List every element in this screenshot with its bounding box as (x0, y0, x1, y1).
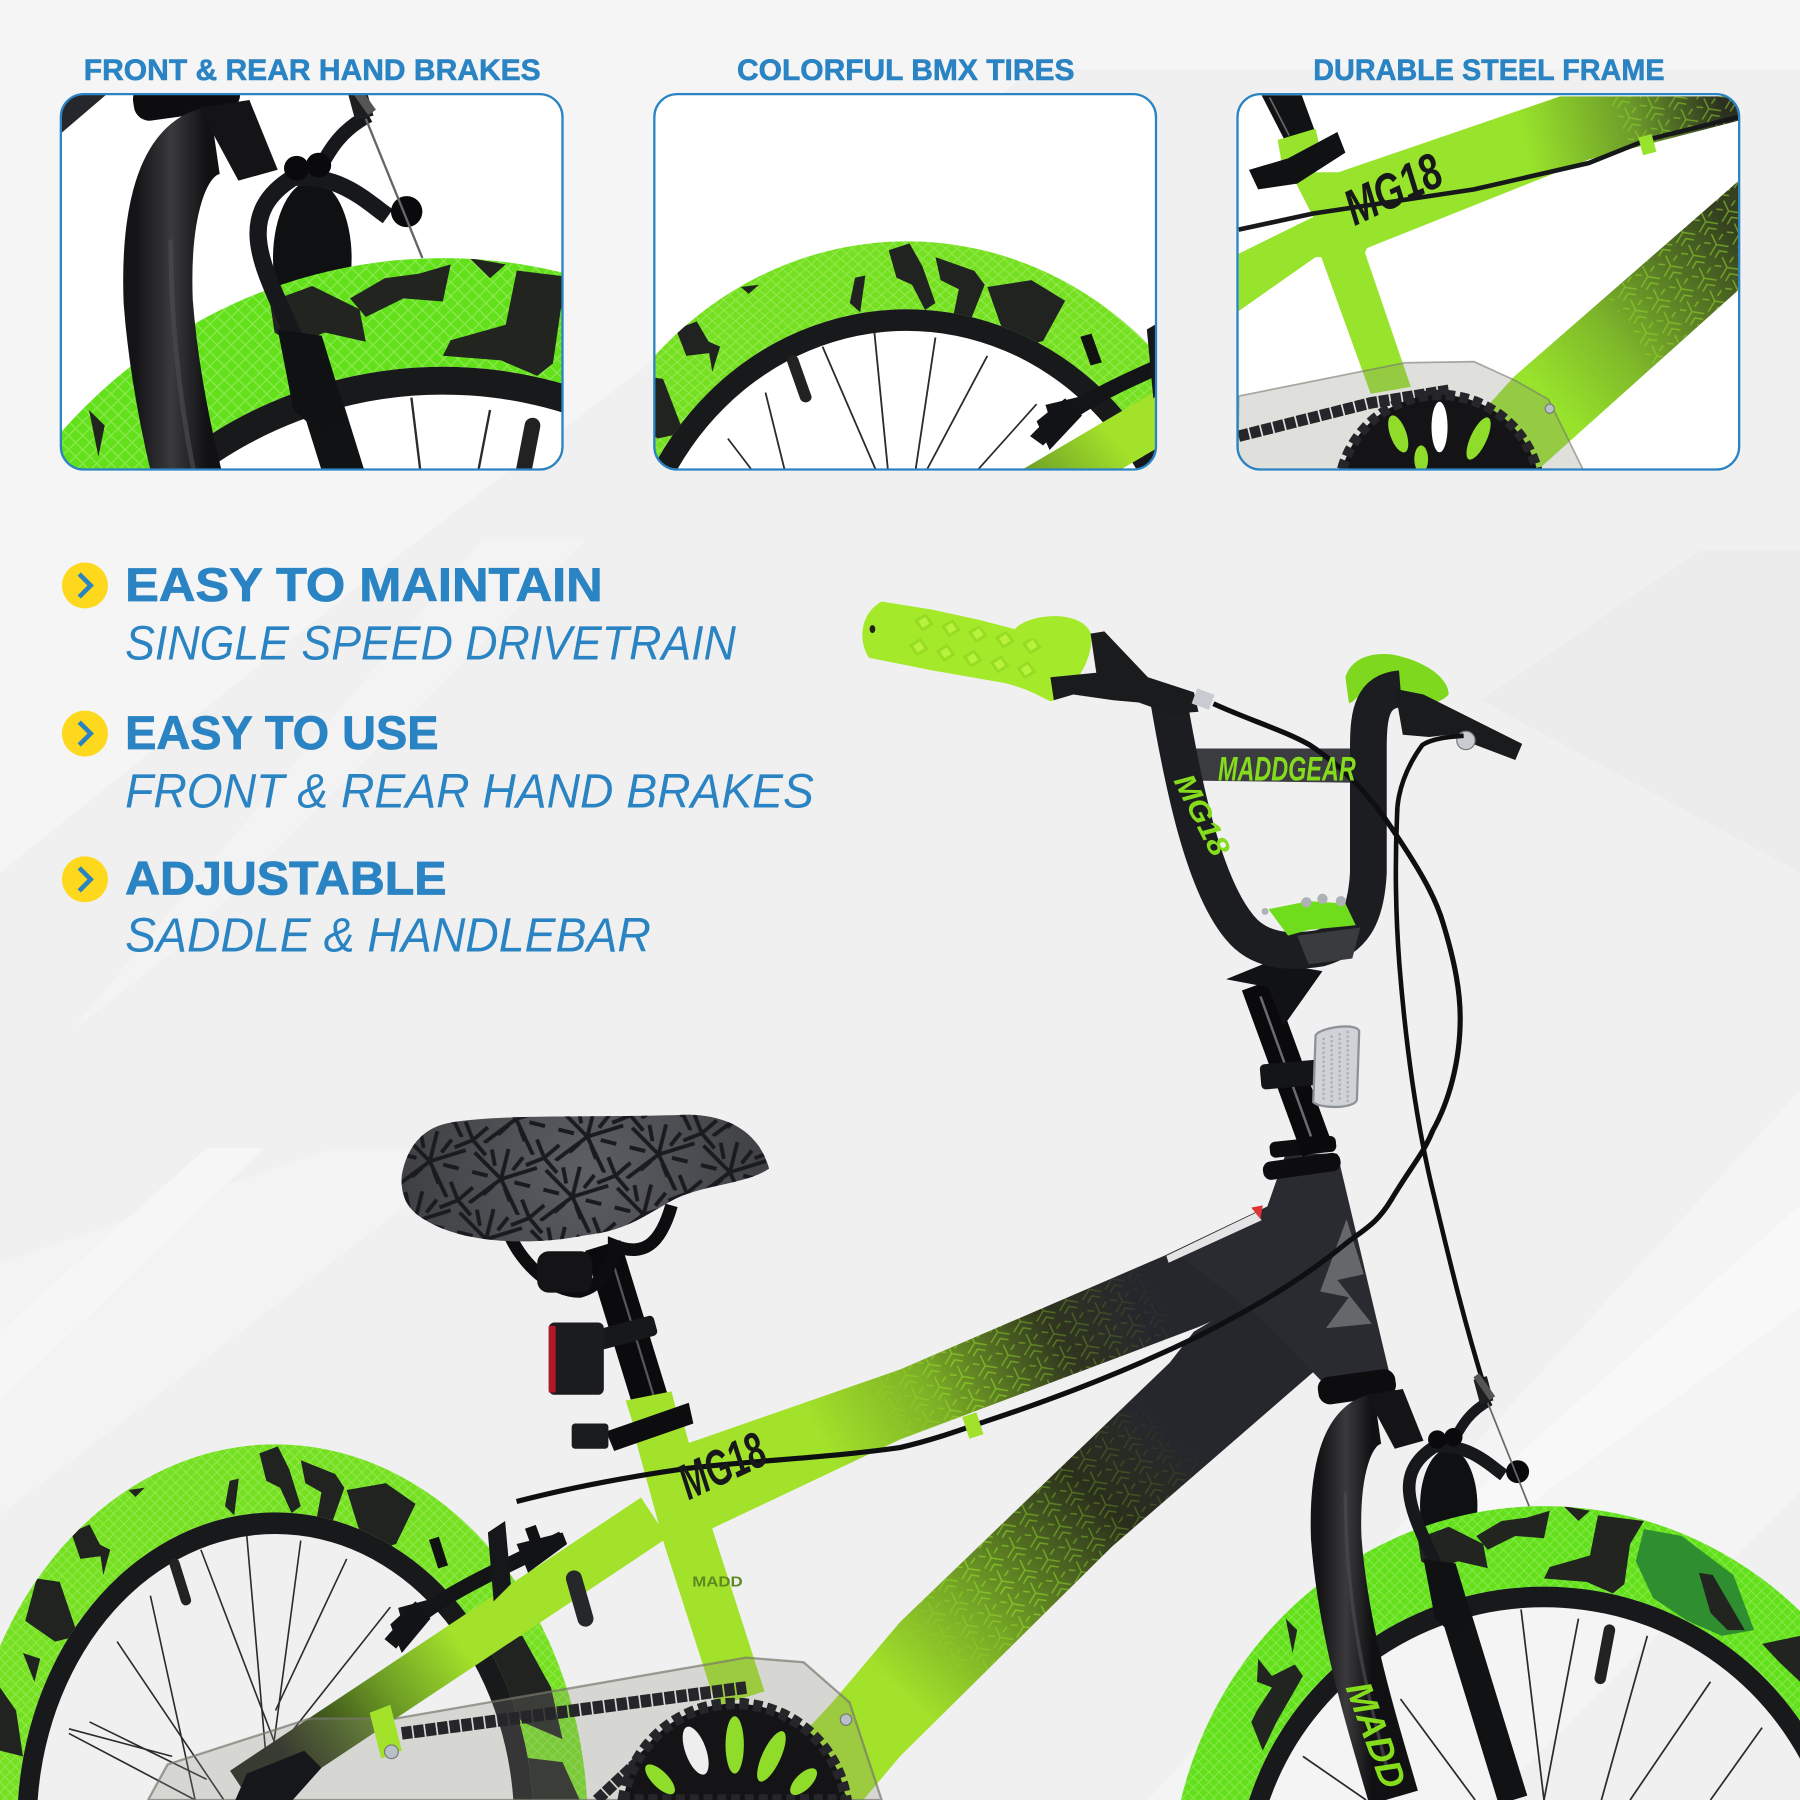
feature: easy to maintain (62, 558, 736, 671)
lettering: top tube model: MG18 (669, 1421, 775, 1510)
heading: front and rear hand brakes: FRONT & REAR HAND BRAKES (84, 54, 541, 87)
lettering: fork brand: MADD (1338, 1676, 1414, 1794)
feature: easy to maintain: EASY TO MAINTAIN (125, 558, 603, 611)
feature: easy to use (62, 706, 814, 819)
panel: hand brakes photo (60, 93, 564, 471)
feature: easy to use: FRONT & REAR HAND BRAKES (125, 765, 814, 819)
icon: yellow chevron bullet (62, 856, 108, 902)
heading: durable steel frame: DURABLE STEEL FRAME (1313, 54, 1665, 87)
panel: steel frame photo (1236, 93, 1740, 471)
feature: adjustable: SADDLE & HANDLEBAR (125, 909, 651, 963)
bike photo illustration (0, 602, 1800, 1800)
lettering: crossbar brand: MADDGEAR (1218, 751, 1356, 789)
feature: easy to maintain: SINGLE SPEED DRIVETRAIN (125, 617, 736, 671)
lettering: seat tube badge: MADD (692, 1573, 743, 1590)
feature: adjustable: ADJUSTABLE (125, 851, 447, 904)
lettering: frame model: MG18 (1335, 141, 1451, 236)
feature: easy to use: EASY TO USE (125, 706, 439, 759)
lettering: handlebar model: MG18 (1167, 769, 1236, 862)
panel: BMX tire photo (653, 93, 1158, 471)
icon: yellow chevron bullet (62, 711, 108, 757)
heading: colorful BMX tires: COLORFUL BMX TIRES (737, 54, 1074, 87)
feature: adjustable (62, 851, 651, 963)
icon: yellow chevron bullet (62, 562, 108, 608)
